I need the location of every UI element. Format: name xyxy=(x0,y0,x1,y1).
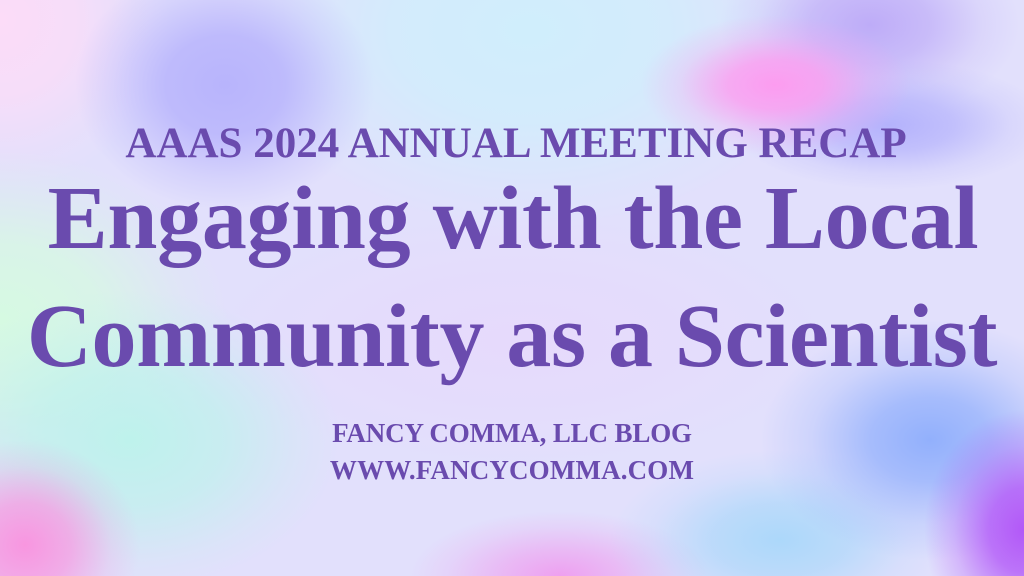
blog credit xyxy=(330,418,694,485)
website: WWW.FANCYCOMMA.COM xyxy=(330,455,694,485)
main title xyxy=(27,169,998,386)
title line 1: Engaging with the Local xyxy=(48,169,978,268)
title line 2: Community as a Scientist xyxy=(27,287,997,386)
subtitle: AAAS 2024 ANNUAL MEETING RECAP xyxy=(125,120,907,167)
blog name: FANCY COMMA, LLC BLOG xyxy=(332,418,692,448)
